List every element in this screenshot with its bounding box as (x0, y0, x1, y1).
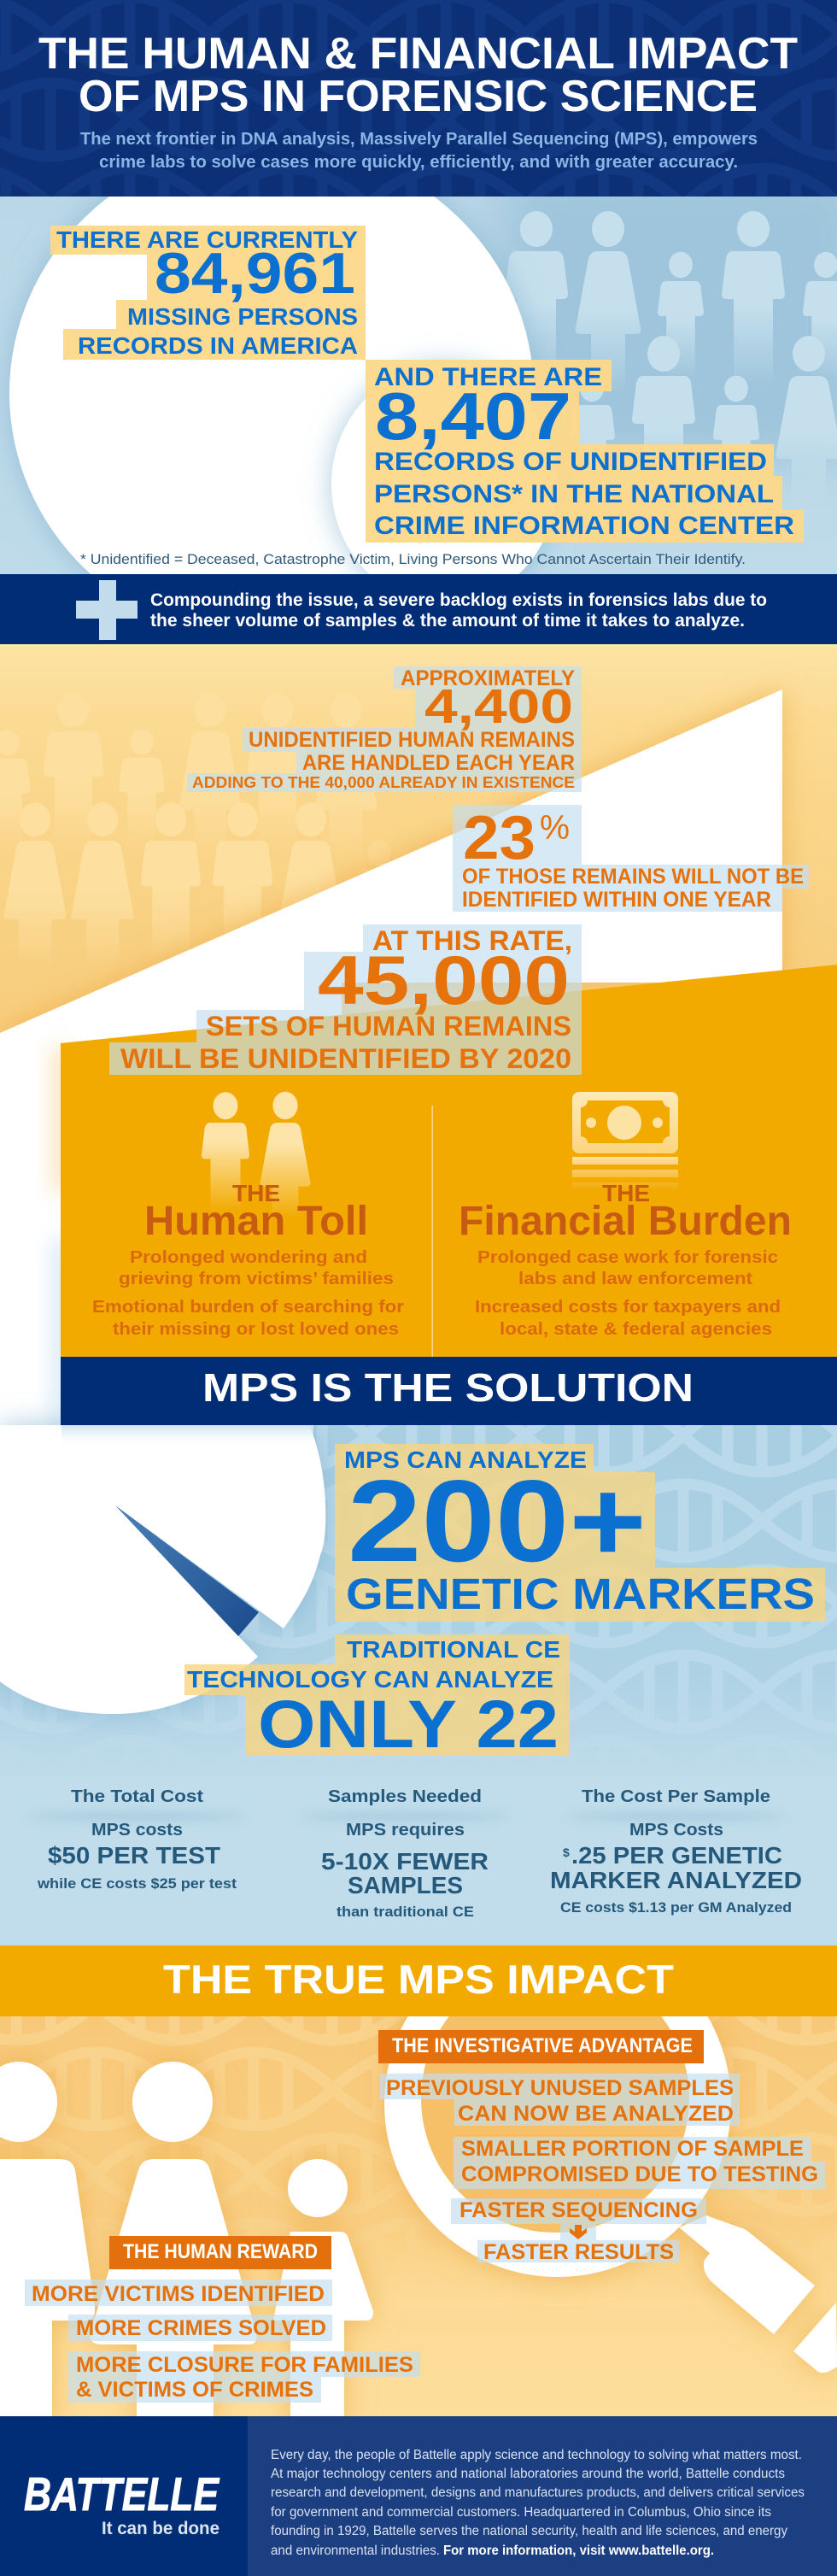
icon: faded crowd (0, 693, 402, 987)
stat: traditional CE only 22: TRADITIONAL CE (347, 1636, 560, 1663)
list: investigative advantages (380, 2074, 825, 2264)
banner text: the sheer volume of samples & the amount of time it takes to analyze. (150, 611, 745, 631)
column: the total cost: The Total Cost (71, 1787, 203, 1806)
stat: 23 percent (453, 804, 809, 912)
stat: 200+ genetic markers: GENETIC MARKERS (346, 1570, 815, 1618)
text: financial burden points: Increased costs for taxpayers and (475, 1298, 781, 1317)
icon: white ellipses (0, 197, 554, 574)
title (38, 29, 798, 121)
stat: 45,000 by 2020: SETS OF HUMAN REMAINS (206, 1011, 571, 1042)
stat: 4,400 remains per year: ADDING TO THE 40,000 ALREADY IN EXISTENCE (192, 774, 575, 791)
logo: Battelle: It can be done (102, 2519, 219, 2538)
text: human toll points (92, 1248, 404, 1339)
stat: 23 percent: 23 (463, 804, 536, 872)
list: investigative advantages: FASTER SEQUENCING (459, 2198, 698, 2222)
panel: amber burden panel (61, 965, 837, 1358)
text: human toll points: grieving from victims’ families (119, 1270, 394, 1288)
footnote: * Unidentified = Deceased, Catastrophe Victim, Living Persons Who Cannot Ascertain Their Identify. (80, 551, 746, 567)
label: the human reward: THE HUMAN REWARD (123, 2240, 318, 2263)
stat: 8,407 unidentified persons (366, 360, 804, 543)
banner: the true MPS impact (0, 1945, 837, 2016)
text: about Battelle: At major technology centers and national laboratories around the world, Battelle conducts (271, 2467, 785, 2481)
text: human toll points: Emotional burden of searching for (92, 1298, 404, 1317)
text: about Battelle (271, 2448, 805, 2558)
stat: 84,961 missing persons: 84,961 (155, 241, 355, 306)
subtitle: crime labs to solve cases more quickly, efficiently, and with greater accuracy. (99, 153, 738, 172)
stat: 45,000 by 2020: 45,000 (318, 942, 570, 1019)
stat: 8,407 unidentified persons: 8,407 (375, 378, 571, 454)
column: the cost per sample: MPS Costs (629, 1821, 723, 1840)
banner: the true MPS impact: THE TRUE MPS IMPACT (163, 1957, 674, 2002)
list: human rewards: & VICTIMS OF CRIMES (76, 2378, 313, 2402)
banner: MPS is the solution: MPS IS THE SOLUTION (202, 1365, 694, 1410)
column: the total cost: while CE costs $25 per test (37, 1875, 237, 1892)
stat: 84,961 missing persons: THERE ARE CURRENTLY (56, 226, 358, 253)
heading: the human toll (144, 1180, 368, 1244)
list: human rewards (25, 2280, 420, 2403)
text: human toll points: their missing or lost loved ones (113, 1320, 399, 1339)
stat: 200+ genetic markers: MPS CAN ANALYZE (344, 1446, 587, 1473)
icon: plus sign (76, 580, 138, 640)
stat: 84,961 missing persons: RECORDS IN AMERICA (78, 332, 358, 359)
text: human toll points: Prolonged wondering and (130, 1248, 367, 1267)
heading: the financial burden: Financial Burden (459, 1199, 792, 1244)
column: the cost per sample: .25 PER GENETIC (571, 1842, 782, 1869)
column: the cost per sample: CE costs $1.13 per GM Analyzed (560, 1899, 792, 1916)
banner: MPS is the solution (61, 1357, 837, 1425)
list: investigative advantages: CAN NOW BE ANALYZED (458, 2102, 734, 2126)
title: THE HUMAN & FINANCIAL IMPACT (38, 29, 798, 79)
banner text (150, 590, 767, 631)
text: about Battelle: for government and commercial customers. Headquartered in Columbus, Ohio since its (271, 2505, 771, 2520)
stat: 8,407 unidentified persons: PERSONS* IN THE NATIONAL (374, 480, 774, 508)
list: human rewards: MORE CRIMES SOLVED (76, 2316, 326, 2340)
panel: MPS solution background (0, 1425, 837, 1945)
text: about Battelle: Every day, the people of Battelle apply science and technology to solving what matters most. (271, 2448, 802, 2462)
arrow: down (570, 2225, 587, 2239)
stat: 84,961 missing persons: MISSING PERSONS (127, 303, 358, 330)
icon: white family (0, 2062, 373, 2426)
stat: 4,400 remains per year: ARE HANDLED EACH YEAR (302, 751, 575, 775)
column: samples needed (299, 1787, 512, 1920)
banner text: Compounding the issue, a severe backlog exists in forensics labs due to (150, 590, 767, 610)
stat: 4,400 remains per year (187, 666, 582, 792)
icon: pie with wedge pointer (0, 1425, 325, 1714)
title: OF MPS IN FORENSIC SCIENCE (79, 72, 758, 121)
stat: traditional CE only 22 (184, 1634, 570, 1762)
icon: crowd of people (506, 211, 837, 477)
text: financial burden points: Prolonged case work for forensic (477, 1248, 778, 1267)
text: financial burden points (475, 1248, 781, 1339)
divider (432, 1106, 433, 1357)
stat: traditional CE only 22: TECHNOLOGY CAN ANALYZE (187, 1666, 553, 1693)
white diagonal shape (0, 689, 782, 1425)
stat: 4,400 remains per year: 4,400 (424, 679, 573, 734)
panel: footer (0, 2416, 837, 2576)
stat: 8,407 unidentified persons: AND THERE ARE (374, 363, 602, 391)
icon: money bill (572, 1092, 678, 1190)
column: the total cost (26, 1787, 248, 1892)
stat: 84,961 missing persons (50, 226, 366, 360)
column: samples needed: 5-10X FEWER (321, 1848, 489, 1875)
column: the total cost: MPS costs (91, 1821, 183, 1840)
subtitle (80, 130, 758, 172)
panel: missing persons (0, 197, 837, 574)
stat: 200+ genetic markers: 200+ (348, 1456, 647, 1586)
logo: Battelle (24, 2467, 220, 2538)
stat: 45,000 by 2020: WILL BE UNIDENTIFIED BY 2020 (120, 1043, 571, 1074)
list: investigative advantages: FASTER RESULTS (483, 2240, 674, 2264)
text: financial burden points: labs and law enforcement (518, 1270, 752, 1288)
stat: 23 percent: % (540, 809, 570, 847)
text: about Battelle: For more information, visit www.battelle.org. (443, 2544, 714, 2558)
stat: 8,407 unidentified persons: RECORDS OF UNIDENTIFIED (374, 448, 767, 476)
list: human rewards: MORE VICTIMS IDENTIFIED (32, 2282, 325, 2306)
panel: header (0, 0, 837, 197)
stat: 23 percent: IDENTIFIED WITHIN ONE YEAR (462, 888, 771, 912)
heading: the human toll: Human Toll (144, 1199, 368, 1244)
column: the cost per sample: The Cost Per Sample (582, 1787, 770, 1806)
label: the investigative advantage: THE INVESTIGATIVE ADVANTAGE (392, 2034, 693, 2057)
list: investigative advantages: SMALLER PORTION OF SAMPLE (461, 2137, 804, 2161)
list: investigative advantages: COMPROMISED DUE TO TESTING (461, 2162, 818, 2186)
label: the human reward (109, 2236, 331, 2269)
icon: magnifying glass (372, 2016, 837, 2383)
list: human rewards: MORE CLOSURE FOR FAMILIES (76, 2353, 413, 2377)
heading: the financial burden: THE (602, 1180, 650, 1206)
stat: 200+ genetic markers (335, 1444, 825, 1622)
stat: 4,400 remains per year: APPROXIMATELY (401, 666, 575, 690)
column: the cost per sample (550, 1787, 802, 1916)
list: investigative advantages: PREVIOUSLY UNUSED SAMPLES (386, 2076, 734, 2100)
column: samples needed: SAMPLES (348, 1872, 463, 1898)
stat: 23 percent: OF THOSE REMAINS WILL NOT BE (462, 865, 804, 889)
column: samples needed: Samples Needed (328, 1787, 482, 1806)
icon: two people (202, 1092, 311, 1241)
heading: the human toll: THE (232, 1180, 280, 1206)
text: about Battelle: research and development, designs and manufactures products, and delivers critical services (271, 2485, 805, 2500)
panel: backlog banner (0, 574, 837, 644)
stat: 45,000 by 2020 (109, 924, 582, 1075)
column: the total cost: $50 PER TEST (48, 1842, 220, 1869)
logo: Battelle: BATTELLE (24, 2467, 220, 2520)
subtitle: The next frontier in DNA analysis, Massively Parallel Sequencing (MPS), empowers (80, 130, 758, 149)
panel: true impact background (0, 2016, 837, 2416)
stat: traditional CE only 22: ONLY 22 (258, 1686, 559, 1762)
column: samples needed: MPS requires (346, 1821, 465, 1840)
text: about Battelle: founding in 1929, Battelle serves the national security, health and life sciences, and energy (271, 2524, 787, 2538)
label: the investigative advantage (378, 2030, 704, 2063)
stat: 4,400 remains per year: UNIDENTIFIED HUMAN REMAINS (249, 728, 575, 752)
text: about Battelle: and environmental industries. (271, 2544, 440, 2558)
stat: 45,000 by 2020: AT THIS RATE, (372, 925, 572, 956)
column: the cost per sample: MARKER ANALYZED (550, 1867, 802, 1893)
stat: 8,407 unidentified persons: CRIME INFORMATION CENTER (374, 512, 794, 540)
panel: unidentified remains background (0, 644, 837, 1435)
column: samples needed: than traditional CE (337, 1904, 474, 1920)
column: the cost per sample: $ (563, 1845, 570, 1859)
text: financial burden points: local, state & federal agencies (500, 1320, 772, 1339)
